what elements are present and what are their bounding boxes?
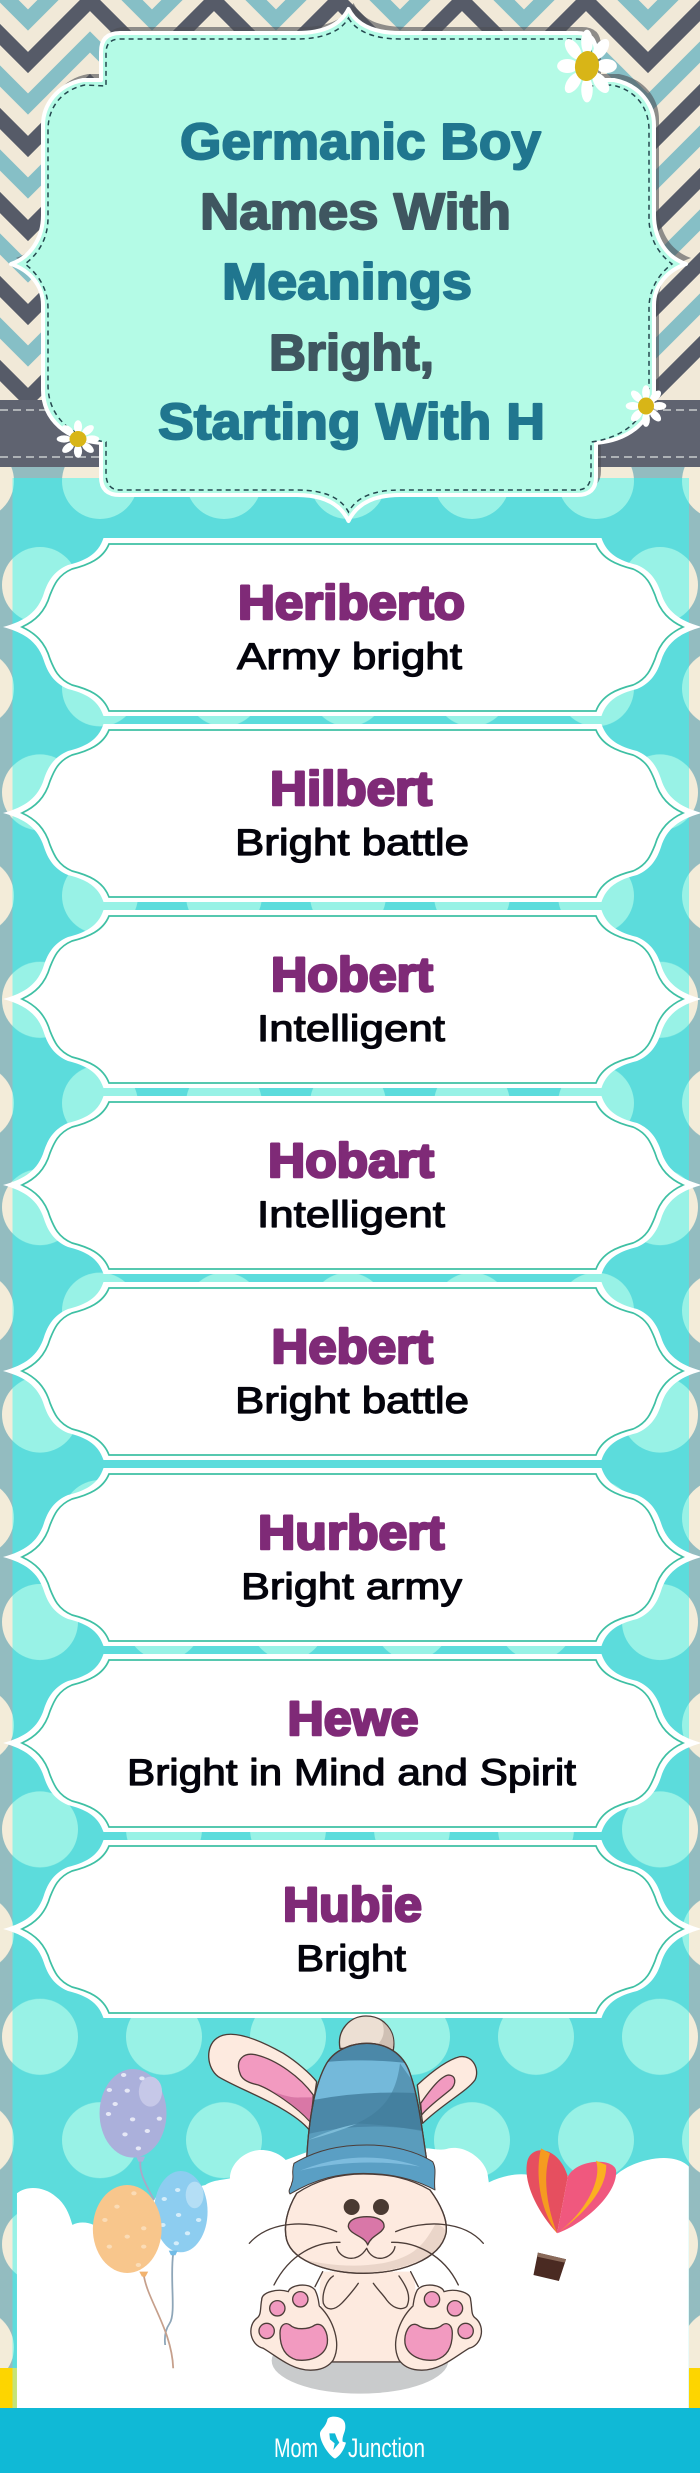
panel: Hubie (3, 1840, 700, 2018)
background: aqua polka dot panel (12, 478, 689, 2409)
panel: Hewe: Bright in Mind and Spirit (127, 1752, 577, 1793)
panel: Hebert: Hebert (272, 1321, 433, 1374)
title (158, 113, 545, 450)
panel: title plaque (11, 3, 691, 521)
panel: Hewe (3, 1654, 700, 1832)
icon: heart balloon basket (533, 2253, 566, 2281)
title: Meanings (222, 253, 472, 310)
panel: Hobert: Hobert (271, 949, 433, 1002)
logo: MomJunction: Junction (348, 2433, 425, 2463)
panel: Hilbert: Hilbert (270, 763, 432, 816)
panel: Heriberto: Army bright (237, 636, 463, 677)
icon: daisy lower left (57, 420, 99, 458)
icon: daisy top right (557, 30, 617, 102)
logo: MomJunction: Mom (274, 2433, 318, 2463)
icon: daisy lower right (626, 385, 666, 427)
background: polka dot edge strip (0, 467, 700, 2409)
icon: bunny with hat (209, 2016, 483, 2394)
panel: Hurbert: Hurbert (258, 1507, 445, 1560)
panel: Hurbert (3, 1468, 700, 1646)
white clouds (17, 2148, 689, 2408)
panel: Hobert: Intelligent (257, 1008, 446, 1049)
footer bar (0, 2408, 700, 2473)
panel: Hilbert (3, 724, 700, 902)
panel: Hebert (3, 1282, 700, 1460)
panel: Heriberto: Heriberto (238, 577, 465, 630)
panel: Hobart: Hobart (268, 1135, 434, 1188)
panel: Hobert (3, 910, 700, 1088)
background: chevron pattern (0, 0, 700, 400)
panel: Hobart: Intelligent (257, 1194, 446, 1235)
panel: Hubie: Bright (296, 1938, 407, 1979)
icon: heart balloon (526, 2148, 616, 2233)
yellow corner accents (0, 2368, 700, 2408)
panel: Hebert: Bright battle (235, 1380, 469, 1421)
icon: balloons (93, 2069, 208, 2368)
panel: Hurbert: Bright army (241, 1566, 463, 1607)
panel: Hobart (3, 1096, 700, 1274)
panel: Hilbert: Bright battle (235, 822, 469, 863)
title: Starting With H (158, 393, 545, 450)
title: Germanic Boy (180, 113, 542, 170)
title: Bright, (269, 324, 434, 381)
panel: Heriberto (3, 538, 700, 716)
grey ribbon band (0, 400, 700, 467)
panel: Hewe: Hewe (288, 1693, 418, 1746)
panel: Hubie: Hubie (283, 1879, 422, 1932)
title: Names With (200, 183, 511, 240)
logo: MomJunction (274, 2417, 425, 2463)
